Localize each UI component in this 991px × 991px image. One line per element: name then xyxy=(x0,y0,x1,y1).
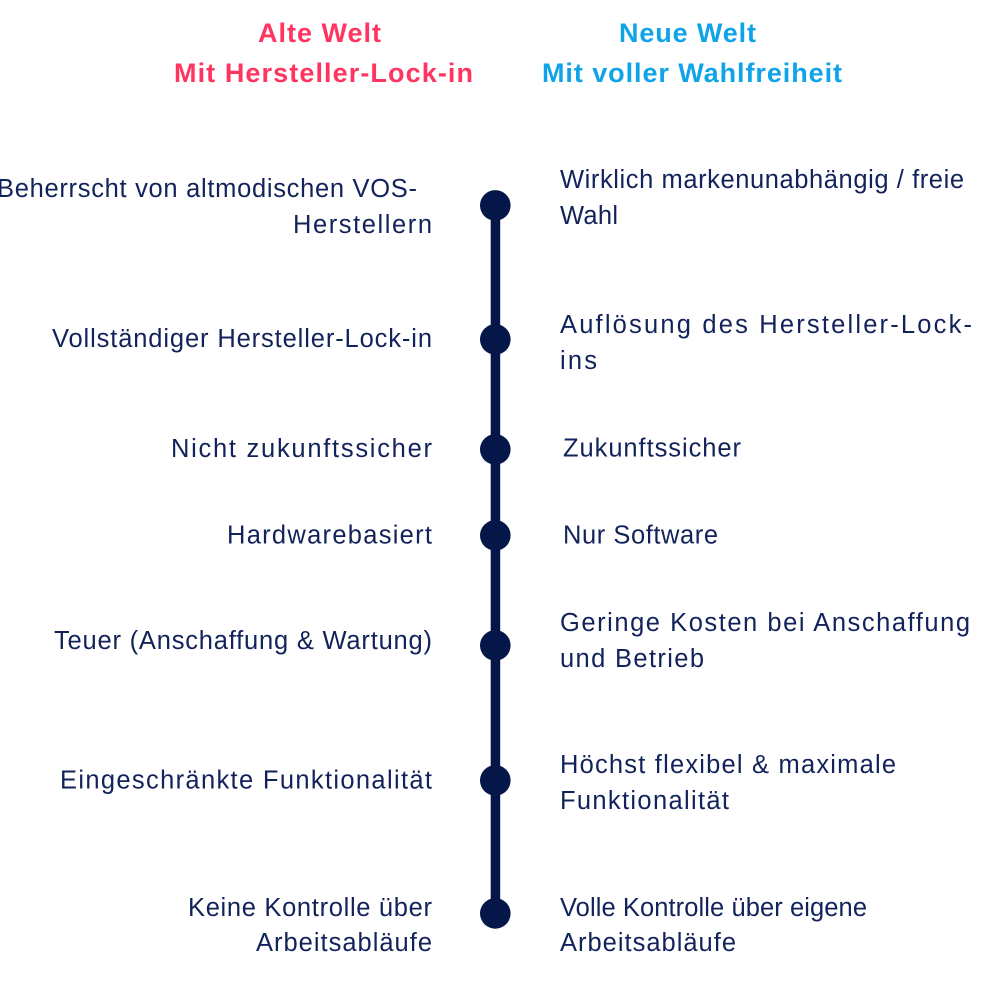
right text: Höchst flexibel & maximale Funktionalität xyxy=(560,751,896,815)
right text: Nur Software: Nur Software xyxy=(563,522,718,550)
left text: Eingeschränkte Funktionalität: Eingeschränkte Funktionalität xyxy=(60,766,432,794)
heading: Neue Welt xyxy=(542,18,842,88)
right text: Geringe Kosten bei Anschaffung und Betrieb xyxy=(560,609,970,673)
right text: Geringe Kosten bei Anschaffung und Betrieb: Geringe Kosten bei Anschaffung xyxy=(560,609,970,637)
left text: Nicht zukunftssicher: Nicht zukunftssicher xyxy=(171,435,432,463)
left text: Beherrscht von altmodischen VOS-Herstellern: Herstellern xyxy=(293,211,432,239)
heading: Neue Welt: Neue Welt xyxy=(619,18,756,48)
right text: Zukunftssicher: Zukunftssicher xyxy=(563,434,742,462)
timeline xyxy=(480,190,511,929)
heading: Alte Welt: Alte Welt xyxy=(258,18,381,48)
right text: Auflösung des Hersteller-Lock-ins: Auflösung des Hersteller-Lock- xyxy=(560,311,972,339)
left text: Keine Kontrolle über Arbeitsabläufe: Arbeitsabläufe xyxy=(256,929,432,957)
right text: Wirklich markenunabhängig / freie Wahl: Wahl xyxy=(560,202,618,230)
right text: Auflösung des Hersteller-Lock-ins xyxy=(560,311,972,375)
left text: Hardwarebasiert: Hardwarebasiert xyxy=(227,522,432,550)
left text: Keine Kontrolle über Arbeitsabläufe: Keine Kontrolle über xyxy=(188,894,432,922)
right text: Volle Kontrolle über eigene Arbeitsabläufe: Arbeitsabläufe xyxy=(560,929,736,957)
left text: Vollständiger Hersteller-Lock-in: Vollständiger Hersteller-Lock-in xyxy=(52,325,432,353)
right text: Geringe Kosten bei Anschaffung und Betrieb: und Betrieb xyxy=(560,645,704,673)
right text: Höchst flexibel & maximale Funktionalität: Höchst flexibel & maximale xyxy=(560,751,896,779)
right text: Volle Kontrolle über eigene Arbeitsabläufe xyxy=(560,894,867,957)
right text: Volle Kontrolle über eigene Arbeitsabläufe: Volle Kontrolle über eigene xyxy=(560,894,867,922)
heading: Neue Welt: Mit voller Wahlfreiheit xyxy=(542,58,842,88)
right text: Wirklich markenunabhängig / freie Wahl: Wirklich markenunabhängig / freie xyxy=(560,166,964,194)
right text: Wirklich markenunabhängig / freie Wahl xyxy=(560,166,964,230)
right text: Auflösung des Hersteller-Lock-ins: ins xyxy=(560,347,597,375)
heading: Alte Welt xyxy=(174,18,473,88)
left text: Beherrscht von altmodischen VOS-Herstellern: Beherrscht von altmodischen VOS- xyxy=(0,175,417,203)
right text: Höchst flexibel & maximale Funktionalität: Funktionalität xyxy=(560,787,729,815)
left text: Keine Kontrolle über Arbeitsabläufe xyxy=(188,894,432,957)
left text: Teuer: Teuer (Anschaffung & Wartung) xyxy=(54,627,432,655)
left text: Beherrscht von altmodischen VOS-Herstellern xyxy=(0,175,432,239)
heading: Alte Welt: Mit Hersteller-Lock-in xyxy=(174,58,473,88)
